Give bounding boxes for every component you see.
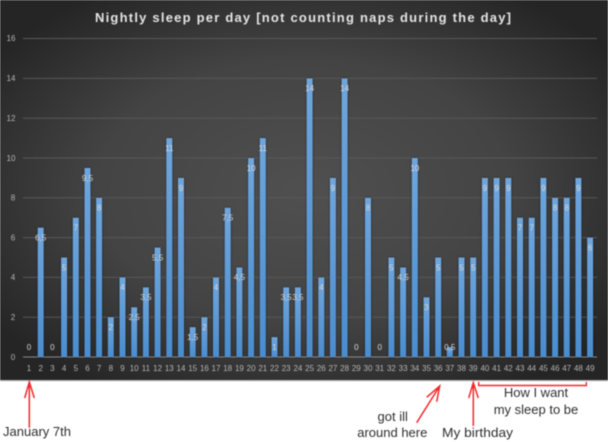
x axis labels: day numbers: 27 (328, 364, 338, 373)
data labels: hours per bar: 0 (27, 343, 32, 352)
data labels: hours per bar: 5 (436, 264, 441, 272)
data labels: hours per bar: 7 (74, 224, 79, 232)
data labels: hours per bar: 4,5 (398, 273, 409, 282)
x axis labels: day numbers (27, 364, 595, 373)
x axis labels: day numbers: 14 (177, 364, 186, 373)
x axis labels: day numbers: 49 (586, 364, 595, 373)
data labels: hours per bar: 11 (165, 144, 174, 153)
x axis labels: day numbers: 13 (165, 364, 174, 373)
y axis labels: 2 (11, 313, 16, 322)
data labels: hours per bar: 9 (331, 184, 336, 193)
x axis labels: day numbers: 44 (527, 364, 537, 373)
x axis labels: day numbers: 42 (504, 364, 513, 373)
annotation: How I want my sleep to be: How I want (504, 385, 569, 400)
x axis labels: day numbers: 7 (97, 364, 102, 373)
bracket: days 40 to 49 (479, 382, 586, 386)
x axis labels: day numbers: 45 (539, 364, 548, 373)
data labels: hours per bar: 7 (529, 224, 534, 232)
x axis labels: day numbers: 31 (375, 364, 385, 373)
data labels: hours per bar: 5 (389, 264, 394, 272)
x axis labels: day numbers: 40 (480, 364, 490, 373)
x axis labels: day numbers: 5 (74, 364, 79, 373)
data labels: hours per bar (27, 84, 593, 352)
data labels: hours per bar: 8 (97, 204, 102, 212)
data labels: hours per bar: 14 (305, 84, 315, 93)
x axis labels: day numbers: 11 (142, 364, 151, 373)
data labels: hours per bar: 3,5 (281, 293, 292, 302)
x axis labels: day numbers: 18 (223, 364, 233, 373)
data labels: hours per bar: 0 (354, 343, 359, 352)
x axis labels: day numbers: 1 (27, 364, 32, 373)
annotation: January 7th: January 7th (3, 425, 71, 439)
annotation: got ill around here: got ill (378, 409, 408, 424)
x axis labels: day numbers: 25 (305, 364, 315, 373)
x axis labels: day numbers: 23 (282, 364, 291, 373)
data labels: hours per bar: 6 (588, 244, 593, 252)
x axis labels: day numbers: 48 (574, 364, 583, 373)
data labels: hours per bar: 9 (494, 184, 499, 193)
data labels: hours per bar: 8 (366, 204, 371, 212)
data labels: hours per bar: 5 (471, 264, 476, 272)
data labels: hours per bar: 7 (518, 224, 523, 232)
annotation: My birthday: My birthday (442, 425, 514, 440)
x axis labels: day numbers: 6 (85, 364, 90, 373)
x axis labels: day numbers: 46 (551, 364, 560, 373)
data labels: hours per bar: 0 (50, 343, 55, 352)
y axis labels (7, 34, 16, 362)
data labels: hours per bar: 9 (576, 184, 581, 193)
x axis labels: day numbers: 41 (492, 364, 502, 373)
y axis labels: 6 (11, 234, 16, 242)
data labels: hours per bar: 3,5 (140, 293, 152, 302)
data labels: hours per bar: 4,5 (234, 273, 246, 282)
x axis labels: day numbers: 26 (317, 364, 326, 373)
x axis labels: day numbers: 22 (270, 364, 279, 373)
x axis labels: day numbers: 34 (410, 364, 420, 373)
arrow: January 7th (25, 382, 34, 428)
x axis labels: day numbers: 30 (364, 364, 373, 373)
data labels: hours per bar: 9 (506, 184, 511, 193)
data labels: hours per bar: 9 (483, 184, 488, 193)
data labels: hours per bar: 10 (247, 164, 256, 173)
data labels: hours per bar: 11 (259, 144, 267, 153)
data labels: hours per bar: 0 (377, 343, 382, 352)
data labels: hours per bar: 9,5 (82, 174, 94, 183)
data labels: hours per bar: 6,5 (35, 234, 47, 242)
y axis labels: 0 (11, 353, 16, 362)
data labels: hours per bar: 8 (553, 204, 558, 212)
y axis labels: 10 (7, 154, 16, 163)
y axis labels: 4 (11, 273, 16, 282)
x axis labels: day numbers: 15 (188, 364, 198, 373)
data labels: hours per bar: 3 (424, 303, 429, 312)
data labels: hours per bar: 5 (62, 264, 67, 272)
data labels: hours per bar: 4 (120, 283, 125, 292)
annotation: How I want my sleep to be (494, 385, 578, 417)
data labels: hours per bar: 1 (272, 343, 277, 352)
data labels: hours per bar: 2,5 (129, 313, 140, 322)
y axis labels: 12 (7, 114, 16, 123)
x axis labels: day numbers: 3 (50, 364, 55, 373)
x axis labels: day numbers: 47 (562, 364, 572, 373)
annotation: got ill around here (357, 409, 427, 440)
x axis labels: day numbers: 39 (469, 364, 478, 373)
data labels: hours per bar: 10 (410, 164, 420, 173)
x axis labels: day numbers: 9 (120, 364, 125, 373)
data labels: hours per bar: 14 (340, 84, 350, 93)
data labels: hours per bar: 1,5 (187, 333, 199, 342)
data labels: hours per bar: 5 (459, 264, 464, 272)
data labels: hours per bar: 9 (541, 184, 546, 193)
x axis labels: day numbers: 2 (38, 364, 43, 373)
data labels: hours per bar: 7,5 (222, 214, 234, 222)
x axis labels: day numbers: 24 (293, 364, 303, 373)
data labels: hours per bar: 4 (214, 283, 219, 292)
x axis labels: day numbers: 35 (422, 364, 431, 373)
x axis labels: day numbers: 4 (62, 364, 67, 373)
x axis labels: day numbers: 16 (200, 364, 209, 373)
data labels: hours per bar: 0,5 (444, 343, 456, 352)
x axis labels: day numbers: 20 (247, 364, 256, 373)
title: Nightly sleep per day [not counting naps during the day] (95, 10, 511, 25)
x axis labels: day numbers: 43 (516, 364, 525, 373)
data labels: hours per bar: 2 (202, 323, 207, 332)
arrow: birthday (469, 383, 478, 426)
x axis labels: day numbers: 12 (153, 364, 163, 373)
data labels: hours per bar: 2 (109, 323, 114, 332)
x axis labels: day numbers: 10 (130, 364, 139, 373)
data labels: hours per bar: 4 (319, 283, 324, 292)
data labels: hours per bar: 5,5 (152, 254, 164, 262)
x axis labels: day numbers: 36 (434, 364, 443, 373)
bar chart: nightly sleep bars (38, 78, 593, 357)
y axis labels: 16 (7, 34, 16, 43)
x axis labels: day numbers: 38 (457, 364, 466, 373)
x axis labels: day numbers: 8 (109, 364, 114, 373)
x axis labels: day numbers: 17 (212, 364, 221, 373)
x axis labels: day numbers: 19 (235, 364, 244, 373)
x axis labels: day numbers: 33 (399, 364, 408, 373)
x axis labels: day numbers: 37 (445, 364, 455, 373)
data labels: hours per bar: 3,5 (292, 293, 304, 302)
x axis labels: day numbers: 29 (352, 364, 361, 373)
annotation: got ill around here: around here (357, 425, 427, 440)
data labels: hours per bar: 8 (564, 204, 569, 212)
x axis labels: day numbers: 32 (387, 364, 396, 373)
arrow: got ill (417, 386, 440, 423)
x axis labels: day numbers: 21 (258, 364, 268, 373)
annotation: How I want my sleep to be: my sleep to be (494, 402, 578, 417)
y axis labels: 8 (11, 194, 16, 202)
y axis labels: 14 (7, 74, 16, 83)
x axis labels: day numbers: 28 (340, 364, 350, 373)
data labels: hours per bar: 9 (179, 184, 184, 193)
